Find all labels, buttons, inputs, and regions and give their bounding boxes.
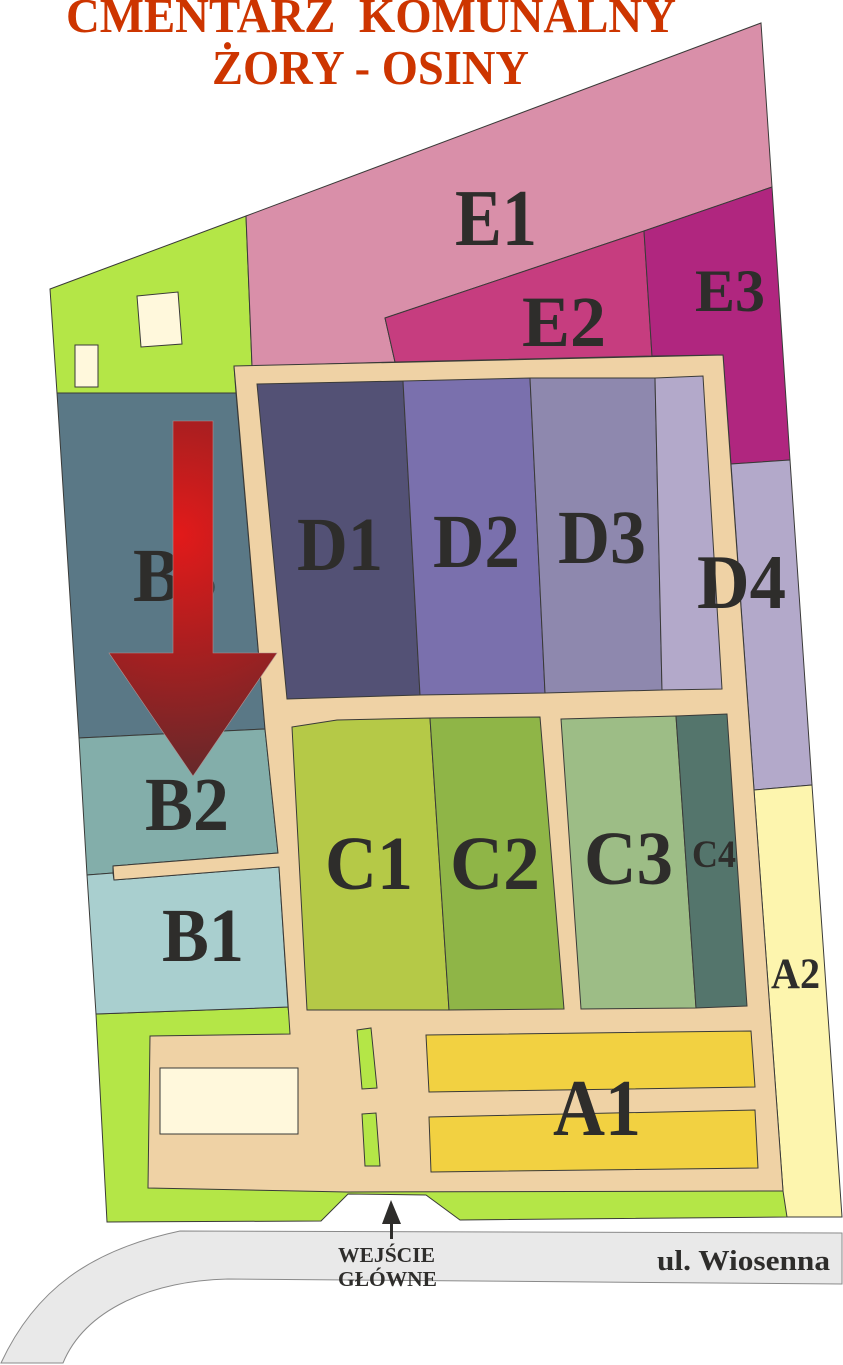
sector B1 xyxy=(87,867,288,1014)
sector D2 xyxy=(403,378,545,695)
label C1: C1 xyxy=(325,822,413,906)
label B1: B1 xyxy=(162,894,244,978)
label A1: A1 xyxy=(553,1065,641,1153)
label A2: A2 xyxy=(771,951,820,998)
green area: north-west xyxy=(50,216,252,393)
label D4: D4 xyxy=(697,539,786,625)
label E2: E2 xyxy=(522,282,606,362)
sector D4 outer xyxy=(731,460,812,790)
green strip upper xyxy=(357,1028,377,1089)
sector C3 xyxy=(561,716,696,1009)
sector E3 xyxy=(644,187,790,464)
title: ŻORY - OSINY xyxy=(212,40,529,95)
label B3: B3 xyxy=(133,534,217,618)
building: small xyxy=(75,345,98,387)
entrance arrow xyxy=(382,1200,401,1239)
street: ul. Wiosenna xyxy=(1,1231,842,1363)
label C2: C2 xyxy=(450,822,540,906)
sector D3 xyxy=(530,378,662,693)
green area: south xyxy=(96,1007,787,1222)
sector C2 xyxy=(430,717,564,1010)
entrance label xyxy=(338,1243,437,1291)
label C3: C3 xyxy=(584,817,673,901)
sector A1 lower xyxy=(429,1110,758,1172)
sector D1 xyxy=(257,381,420,699)
label C4: C4 xyxy=(692,833,736,876)
sector B2 xyxy=(79,729,278,875)
sector C4 xyxy=(676,714,747,1008)
label D2: D2 xyxy=(433,500,520,584)
sector B3 xyxy=(57,393,265,738)
title xyxy=(66,0,676,95)
green strip lower xyxy=(362,1113,380,1166)
sector A2 xyxy=(754,785,842,1217)
sector D4 inner xyxy=(655,376,722,690)
sector E1 xyxy=(246,23,772,366)
label D1: D1 xyxy=(297,503,383,587)
sector E2 xyxy=(385,231,652,362)
sector C1 xyxy=(292,718,449,1010)
building: entrance hall xyxy=(160,1068,298,1134)
label B2: B2 xyxy=(145,763,229,847)
alleys xyxy=(113,355,783,1192)
label D3: D3 xyxy=(558,496,646,580)
sector A1 upper xyxy=(426,1031,755,1092)
label E3: E3 xyxy=(695,258,765,324)
entrance label: WEJŚCIE xyxy=(338,1243,435,1267)
building: square xyxy=(137,292,182,347)
entrance label: GŁÓWNE xyxy=(338,1267,437,1291)
label E1: E1 xyxy=(455,175,537,263)
red location arrow xyxy=(109,421,277,776)
street: ul. Wiosenna: ul. Wiosenna xyxy=(657,1245,831,1277)
